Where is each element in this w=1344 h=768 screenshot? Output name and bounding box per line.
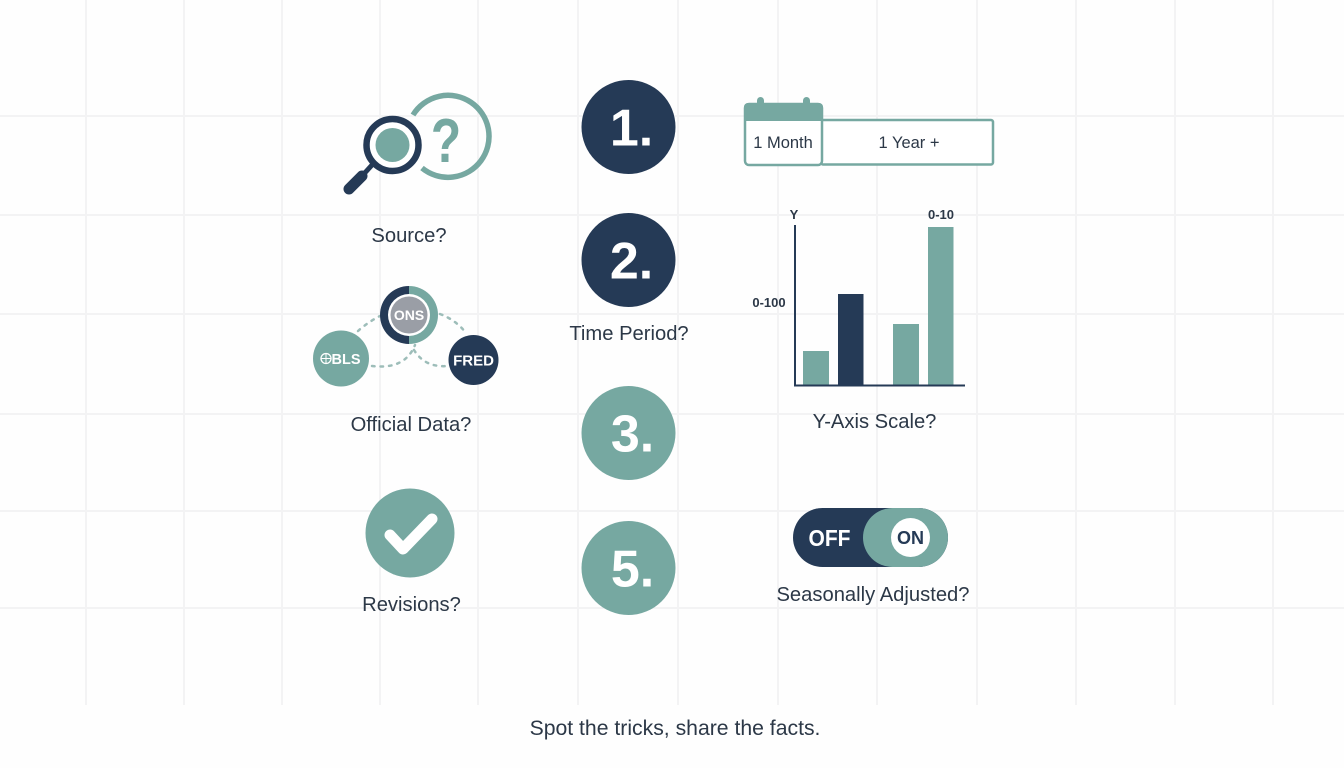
icon: revisions check mark xyxy=(366,488,454,578)
chart: y-axis scale bars: 0-10 xyxy=(928,207,954,222)
chart: y-axis scale bars: Y xyxy=(790,207,799,222)
number badge 5 xyxy=(582,521,676,615)
number badge 5: 5. xyxy=(611,540,654,598)
icon: magnifier with question mark: ? xyxy=(431,106,461,175)
icon: magnifier with question mark xyxy=(349,95,489,189)
icon: calendar time period bar: 1 Year + xyxy=(878,134,940,152)
number badge 2: 2. xyxy=(610,232,653,290)
icon: official data sources network: FRED xyxy=(453,352,494,370)
icon: official data sources network: ONS xyxy=(394,307,424,323)
number badge 1: 1. xyxy=(610,100,653,158)
icon: seasonally adjusted toggle: ON xyxy=(897,528,924,548)
label: source: Source? xyxy=(371,225,447,247)
label: y-axis scale: Y-Axis Scale? xyxy=(813,411,936,433)
icon: official data sources network: BLS xyxy=(332,352,361,368)
label: revisions: Revisions? xyxy=(362,594,461,616)
number badge 3 xyxy=(582,386,676,480)
icon: official data sources network xyxy=(313,286,498,386)
label: official data: Official Data? xyxy=(351,414,471,436)
icon: calendar time period bar xyxy=(744,97,993,165)
chart: y-axis scale bars: 0-100 xyxy=(752,295,786,310)
footer tagline: Spot the tricks, share the facts. xyxy=(530,717,820,740)
label: seasonally adjusted: Seasonally Adjusted? xyxy=(776,584,970,606)
chart: y-axis scale bars xyxy=(752,207,965,386)
icon: calendar time period bar: 1 Month xyxy=(753,134,813,152)
label: time period: Time Period? xyxy=(569,323,689,345)
icon: seasonally adjusted toggle: OFF xyxy=(808,525,850,551)
number badge 2 xyxy=(582,213,676,307)
number badge 1 xyxy=(582,80,676,174)
number badge 3: 3. xyxy=(611,406,654,464)
icon: seasonally adjusted toggle xyxy=(793,508,948,567)
